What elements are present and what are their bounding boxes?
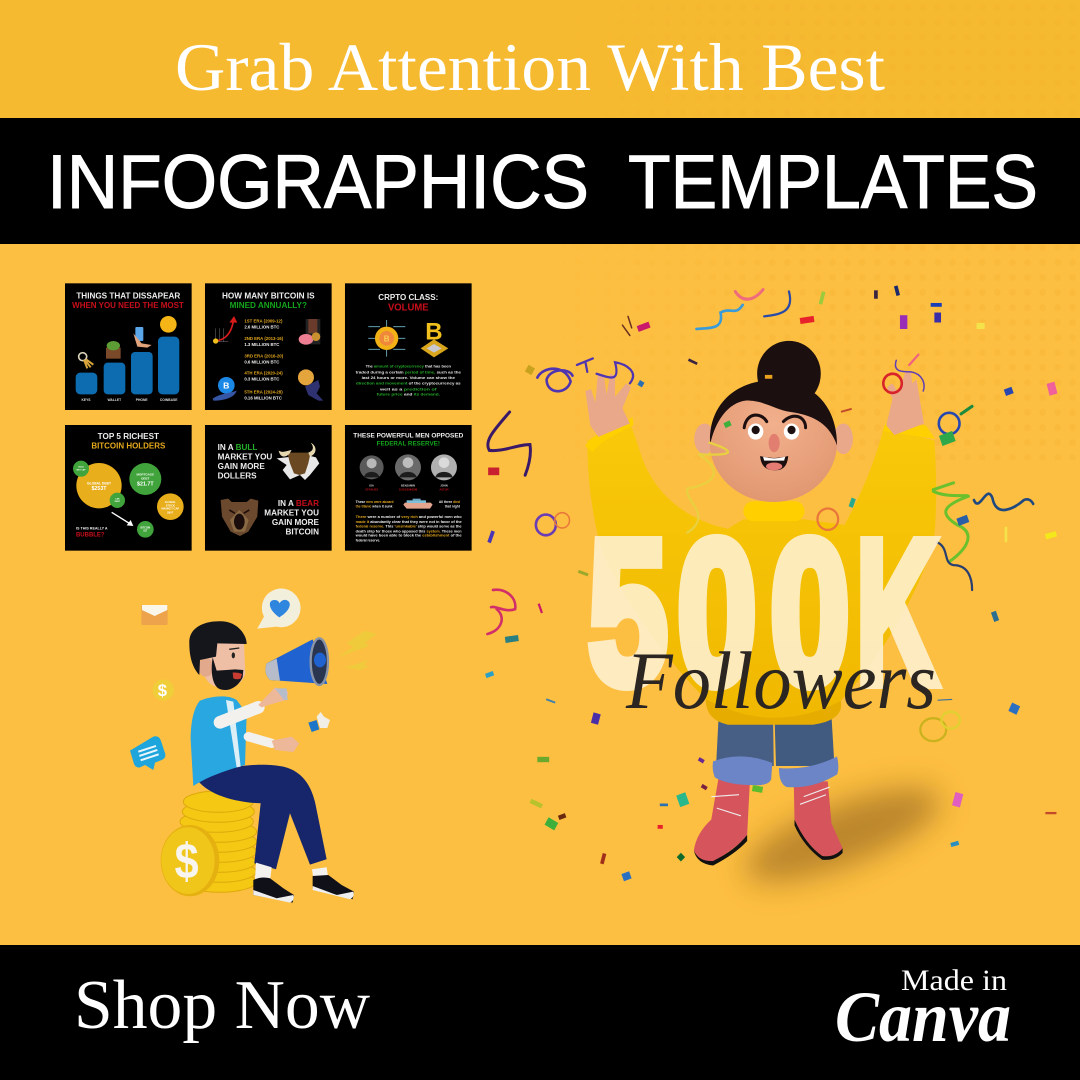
icon: envelope <box>141 605 168 625</box>
panel: top 5 richest: $253T <box>91 486 107 492</box>
arms <box>220 687 299 752</box>
panel: powerful men: would have been able to block the establishment of the <box>354 534 462 538</box>
icon: lightning bolts <box>337 631 377 670</box>
title: Infographics Templates <box>47 140 1038 225</box>
icon: thumbs up <box>308 712 330 732</box>
panel: powerful men: There were a number of very rich and powerful men who <box>356 515 462 519</box>
coin stack <box>180 791 257 892</box>
panel: top 5 richest: CAR <box>115 497 120 500</box>
panel: bull and bear market: IN A BULL <box>218 443 257 452</box>
title: Infographics Templates: TEMPLATES <box>628 140 1038 225</box>
panel: top 5 richest: MKT CAP <box>76 468 86 471</box>
panel: crypto class volume: CRPTO CLASS: <box>378 293 438 302</box>
panel: crypto class volume: direction and movement of the cryptocurrency as <box>356 382 461 386</box>
panel: top 5 richest: TOP 5 RICHEST <box>98 432 159 441</box>
panel: powerful men: the titanic when it sunk <box>356 504 393 508</box>
shirt <box>191 696 247 786</box>
big number: 500K <box>588 498 937 728</box>
panel: crypto class volume: B <box>425 318 443 345</box>
panel: bull and bear market: GAIN MORE <box>218 462 265 471</box>
panel: things that disappear: KEYS <box>81 398 91 402</box>
panel: things that disappear <box>65 283 192 410</box>
panel: powerful men: FEDERAL RESERVE! <box>377 441 440 448</box>
big number: 500K: K <box>856 498 937 728</box>
head <box>710 383 837 502</box>
black title band <box>0 118 1080 244</box>
panel: how many bitcoin: MINED ANNUALLY? <box>230 301 307 310</box>
bottom black band <box>0 945 1080 1080</box>
panel: bull and bear market: GAIN MORE <box>272 518 320 527</box>
panel: how many bitcoin <box>205 283 332 410</box>
panel: bull and bear market: DOLLERS <box>218 471 257 480</box>
panel: top 5 richest: $1T <box>143 531 148 533</box>
badge: Made in Canva: Canva <box>835 977 1011 1057</box>
panel: bull and bear market: IN A BEAR <box>278 499 319 508</box>
panel: things that disappear: WHEN YOU NEED THE MOST <box>72 301 184 310</box>
panel: crypto class volume: The amount of cryptocurrency that has been <box>366 364 451 368</box>
panel: crypto class volume: last 24 hours or more. Volume can show the <box>362 376 455 380</box>
thumbnails row one <box>65 283 472 410</box>
panel: how many bitcoin: 4TH ERA (2020-24) <box>244 371 283 376</box>
panel: powerful men <box>345 425 472 551</box>
boots <box>694 778 843 866</box>
call to action: Shop Now: Shop Now <box>74 967 370 1044</box>
panel: top 5 richest: BITCOIN HOLDERS <box>91 442 166 451</box>
panel: things that disappear: COINBASE <box>160 398 178 402</box>
panel: top 5 richest: GLOBAL <box>165 500 176 504</box>
title: Infographics Templates: INFOGRAPHICS <box>47 140 589 225</box>
panel: powerful men: federal reserve. <box>356 538 380 542</box>
cast shadow <box>735 769 950 900</box>
panel: how many bitcoin: 3RD ERA (2016-20) <box>244 354 284 359</box>
panel: top 5 richest: $95T <box>167 510 174 514</box>
panel: bull and bear market <box>205 425 332 551</box>
panel: how many bitcoin: 0.6 MILLION BTC <box>244 359 279 364</box>
panel: top 5 richest: STOCK <box>166 503 175 507</box>
panel: crypto class volume: traded during a certain period of time, such as the <box>356 370 461 374</box>
icon: dollar coin small <box>153 679 174 701</box>
panel: crypto class volume: B <box>384 334 390 343</box>
panel: crypto class volume <box>345 283 472 410</box>
icon: dollar coin small: $ <box>158 681 168 700</box>
panel: crypto class volume: VOLUME <box>388 302 429 313</box>
big number: 500K: 0 <box>770 499 850 727</box>
panel: top 5 richest: DEBT <box>141 477 150 481</box>
panel: top 5 richest: GOLD <box>78 467 84 469</box>
panel: how many bitcoin: B <box>223 380 229 390</box>
panel: top 5 richest: BITCOIN <box>141 528 150 530</box>
panel: how many bitcoin: 2ND ERA (2013-16) <box>244 336 284 341</box>
panel: powerful men: GUGGENHEIM <box>399 487 418 491</box>
panel: powerful men: STRAUSS <box>365 487 378 491</box>
panel: top 5 richest: MORTGAGE <box>137 473 154 477</box>
panel: top 5 richest: DEBT <box>115 501 121 503</box>
panel: things that disappear: WALLET <box>107 398 121 402</box>
panel: powerful men: THESE POWERFUL MEN OPPOSED <box>353 432 463 439</box>
panel: how many bitcoin: HOW MANY BITCOIN IS <box>222 292 315 301</box>
panel: how many bitcoin: 0.3 MILLION BTC <box>244 376 279 381</box>
icon: heart speech bubble <box>257 589 301 629</box>
illustration: celebrating woman <box>485 285 1057 900</box>
top orange band <box>0 0 1080 118</box>
panel: crypto class volume: future price and its demand. <box>377 393 440 397</box>
face <box>744 415 806 470</box>
hands <box>585 372 924 437</box>
panel: things that disappear: PHONE <box>136 398 148 402</box>
panel: top 5 richest <box>65 425 192 551</box>
script text: Followers: Followers <box>625 635 936 726</box>
panel: how many bitcoin: 5TH ERA (2024-28) <box>244 389 283 394</box>
panel: powerful men: These men were aboard <box>356 500 394 504</box>
coin with dollar sign: $ <box>175 833 199 889</box>
panel: how many bitcoin: 1.3 MILLION BTC <box>244 342 279 347</box>
confetti pieces <box>485 285 1057 881</box>
panel: top 5 richest: IS THIS REALLY A <box>76 526 108 530</box>
shorts <box>713 716 838 787</box>
confetti ribbons <box>487 290 1033 741</box>
socks <box>255 863 328 882</box>
panel: powerful men: death ship for those who opposed this system. These men <box>356 529 462 533</box>
thumbnails row two <box>65 425 472 551</box>
badge: Made in Canva: Made in <box>901 964 1007 997</box>
head <box>189 621 247 690</box>
illustration: man with megaphone on coins <box>130 589 377 903</box>
shoes <box>253 875 354 903</box>
panel: bull and bear market: MARKET YOU <box>264 509 319 518</box>
bun <box>757 341 821 407</box>
panel: powerful men: ASTOR <box>439 487 449 491</box>
panel: bull and bear market: MARKET YOU <box>218 452 272 461</box>
panel: top 5 richest: $21.7T <box>137 482 154 488</box>
trousers <box>197 765 327 869</box>
heading: Grab Attention With Best: Grab Attention With Best <box>175 29 885 105</box>
panel: powerful men: All three died <box>439 500 460 504</box>
panel: powerful men: ISA <box>369 483 374 487</box>
icon: chat bubble <box>130 736 165 770</box>
panel: powerful men: JOHN <box>440 483 448 487</box>
sweater <box>585 417 936 725</box>
panel: powerful men: that night <box>445 504 461 508</box>
panel: top 5 richest: MARKET CAP <box>161 507 179 511</box>
panel: powerful men: BENJAMIN <box>401 483 415 487</box>
big number: 500K: 0 <box>677 499 757 727</box>
panel: things that disappear: THINGS THAT DISSAPEAR <box>76 292 181 301</box>
halftone texture <box>560 0 1080 460</box>
panel: top 5 richest: GLOBAL DEBT <box>87 481 111 485</box>
megaphone <box>266 638 328 700</box>
panel: bull and bear market: BITCOIN <box>285 527 319 536</box>
ears <box>694 424 853 454</box>
panel: top 5 richest: BUBBLE? <box>76 532 105 538</box>
coin with dollar sign <box>161 825 219 896</box>
panel: how many bitcoin: 2.6 MILLION BTC <box>244 325 279 330</box>
panel: powerful men: federal reserve. This 'unsinkable' ship would serve as the <box>356 525 462 529</box>
hair <box>710 380 837 445</box>
panel: how many bitcoin: 0.16 MILLION BTC <box>244 395 282 400</box>
panel: how many bitcoin: 1ST ERA (2009-12) <box>244 318 283 323</box>
big number: 500K: 5 <box>588 499 668 727</box>
panel: crypto class volume: well as a prediction of <box>378 387 438 391</box>
panel: powerful men: made it abundantly clear that they were not in favor of the <box>356 520 462 524</box>
